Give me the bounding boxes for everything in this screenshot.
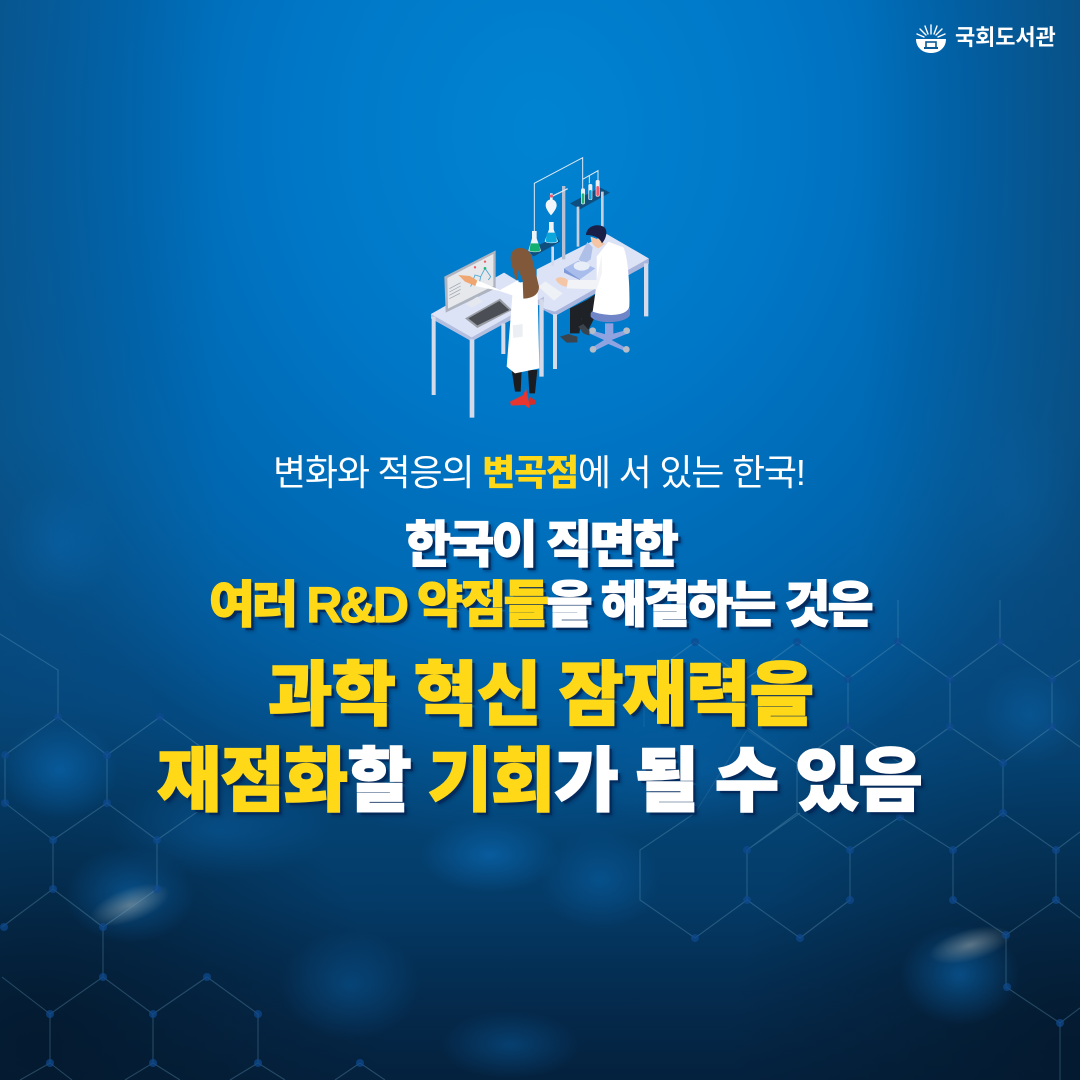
apparatus: test tubes xyxy=(581,180,600,204)
heading line 2: 여러 R&D 약점들을 해결하는 것은 xyxy=(209,577,871,633)
seated scientist xyxy=(556,225,630,353)
back desk xyxy=(537,234,649,369)
keyboard xyxy=(465,299,512,328)
apparatus: separating funnel xyxy=(546,193,557,215)
standing scientist xyxy=(458,248,539,408)
subtitle: 변화와 적응의 변곡점에 서 있는 한국! xyxy=(273,452,805,493)
main message line 2: 재점화할 기회가 될 수 있음 xyxy=(157,742,922,820)
monitor xyxy=(444,250,496,313)
front desk xyxy=(431,273,544,418)
illustration: two scientists in a laboratory xyxy=(431,156,649,418)
microscope xyxy=(564,242,595,280)
apparatus: shelf and stands xyxy=(528,186,610,266)
logo wordmark: 국회도서관 xyxy=(955,25,1056,50)
heading line 1: 한국이 직면한 xyxy=(405,517,676,573)
icon: logo emblem xyxy=(916,24,946,53)
notebook xyxy=(538,281,563,301)
apparatus: flasks xyxy=(528,222,558,252)
logo: National Assembly Library xyxy=(916,24,1056,53)
main message line 1: 과학 혁신 잠재력을 xyxy=(268,656,813,734)
apparatus: tubing xyxy=(534,158,598,233)
